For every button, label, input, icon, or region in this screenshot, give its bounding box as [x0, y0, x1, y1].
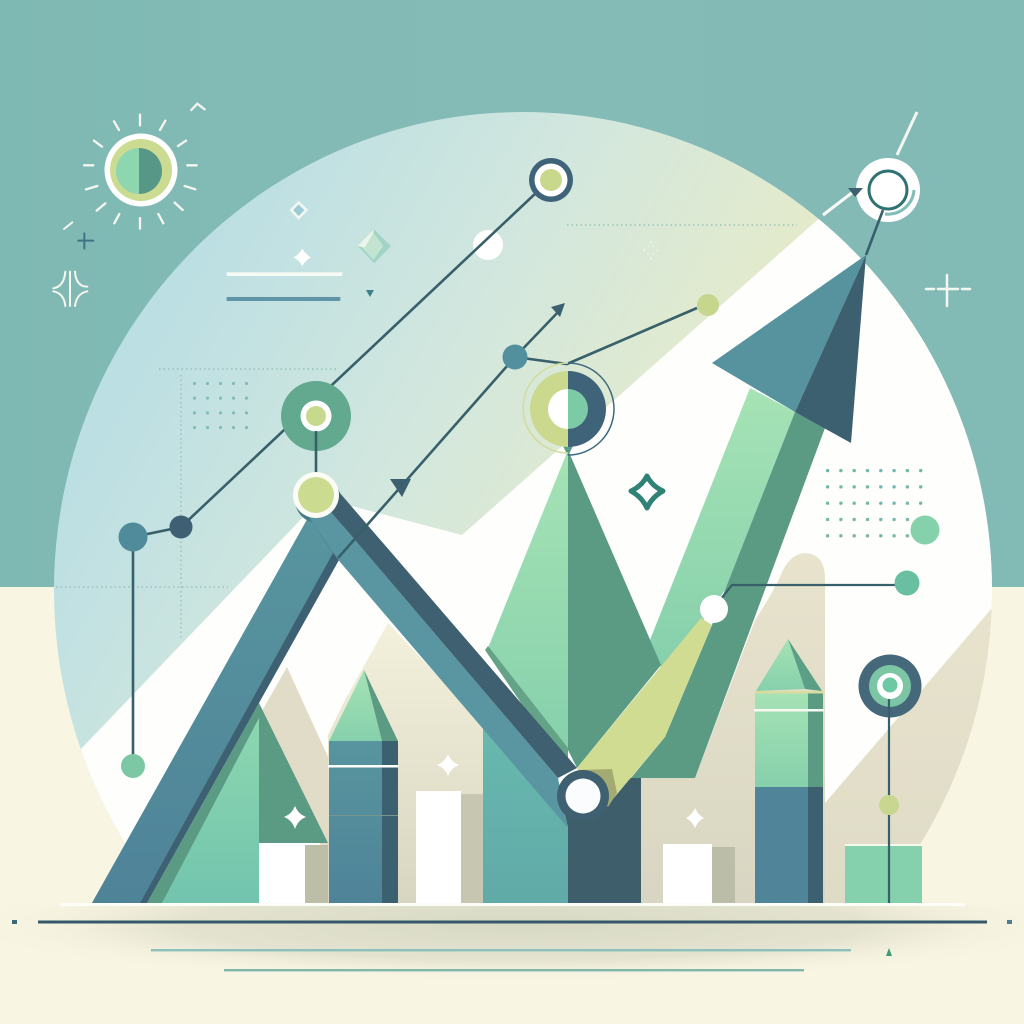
- zigzag trend line: right leg: [295, 477, 577, 828]
- line series one: [118, 158, 573, 778]
- back shape: right rounded tower: [641, 553, 825, 903]
- background: teal sky: [0, 0, 1024, 587]
- dot grid right: [825, 468, 923, 540]
- sun disc: [104, 134, 178, 206]
- yellow arrow segment: [577, 618, 712, 807]
- small dash right: [1007, 920, 1012, 924]
- ground shadow: [88, 906, 952, 968]
- star on green triangle: [284, 806, 306, 829]
- right tower: [754, 639, 824, 903]
- teal line one: [151, 949, 851, 951]
- white star: [294, 249, 311, 266]
- teal line two: [224, 969, 804, 971]
- centre donut: [523, 363, 614, 455]
- central teal and dark columns: [483, 725, 641, 903]
- node blue: [118, 522, 148, 552]
- top target node: [529, 158, 573, 202]
- green circle right: [910, 516, 940, 544]
- dot grid left: [192, 381, 252, 439]
- faint star: [642, 241, 660, 261]
- background: cream ground: [0, 587, 1024, 1024]
- white bar 3: [663, 844, 735, 904]
- right green bar: [845, 844, 922, 904]
- icon: sun: [84, 115, 197, 229]
- valley node: [557, 770, 609, 822]
- left green triangle: [147, 703, 328, 903]
- blue node: [502, 344, 528, 370]
- sun rays: [84, 115, 197, 229]
- large green node with stem: [281, 381, 351, 518]
- small green mark: [886, 948, 892, 956]
- white bar 1: [259, 843, 328, 904]
- top arrow head: [551, 303, 565, 317]
- diamond outline: [291, 203, 306, 218]
- connector with white node: [700, 570, 920, 623]
- white node on line: [473, 230, 503, 260]
- back mountain: left: [258, 667, 328, 860]
- green diamond: [358, 229, 391, 263]
- dotted guide lines: [56, 225, 797, 638]
- centre peak: [485, 446, 661, 768]
- decorative header elements in circle: [227, 203, 391, 301]
- plus sparkle right: [926, 275, 970, 306]
- node dark: [170, 516, 192, 538]
- white bar line: [227, 272, 342, 276]
- back mountain: centre: [328, 623, 484, 903]
- yellow node: [697, 294, 719, 316]
- ground white line: [60, 903, 965, 906]
- blue bar line: [227, 297, 340, 301]
- arrow shaft: [631, 388, 825, 778]
- small teal triangle: [366, 290, 374, 297]
- mid arrow head: [390, 479, 411, 497]
- white area under the trend line: [81, 219, 992, 886]
- node lower green: [121, 754, 145, 778]
- polyline: [133, 192, 537, 755]
- line series two with arrows: [338, 294, 719, 558]
- cream floor covering the disc below the baseline: [0, 904, 1024, 1024]
- white bar 2: [416, 791, 483, 904]
- right target with stem: [858, 654, 922, 903]
- dark green star outline: [631, 476, 663, 508]
- ground dark line: [38, 920, 987, 924]
- star above white bar: [437, 754, 459, 776]
- top right target node with arrow: [823, 112, 920, 255]
- arrow head: [712, 255, 866, 443]
- blue tower left: [328, 670, 398, 903]
- zigzag trend line: left leg: [92, 516, 339, 903]
- small dash left: [12, 920, 17, 924]
- star above white bar 3: [686, 808, 704, 828]
- beige hill on the right: [825, 608, 992, 903]
- small sky glyphs: [53, 104, 205, 306]
